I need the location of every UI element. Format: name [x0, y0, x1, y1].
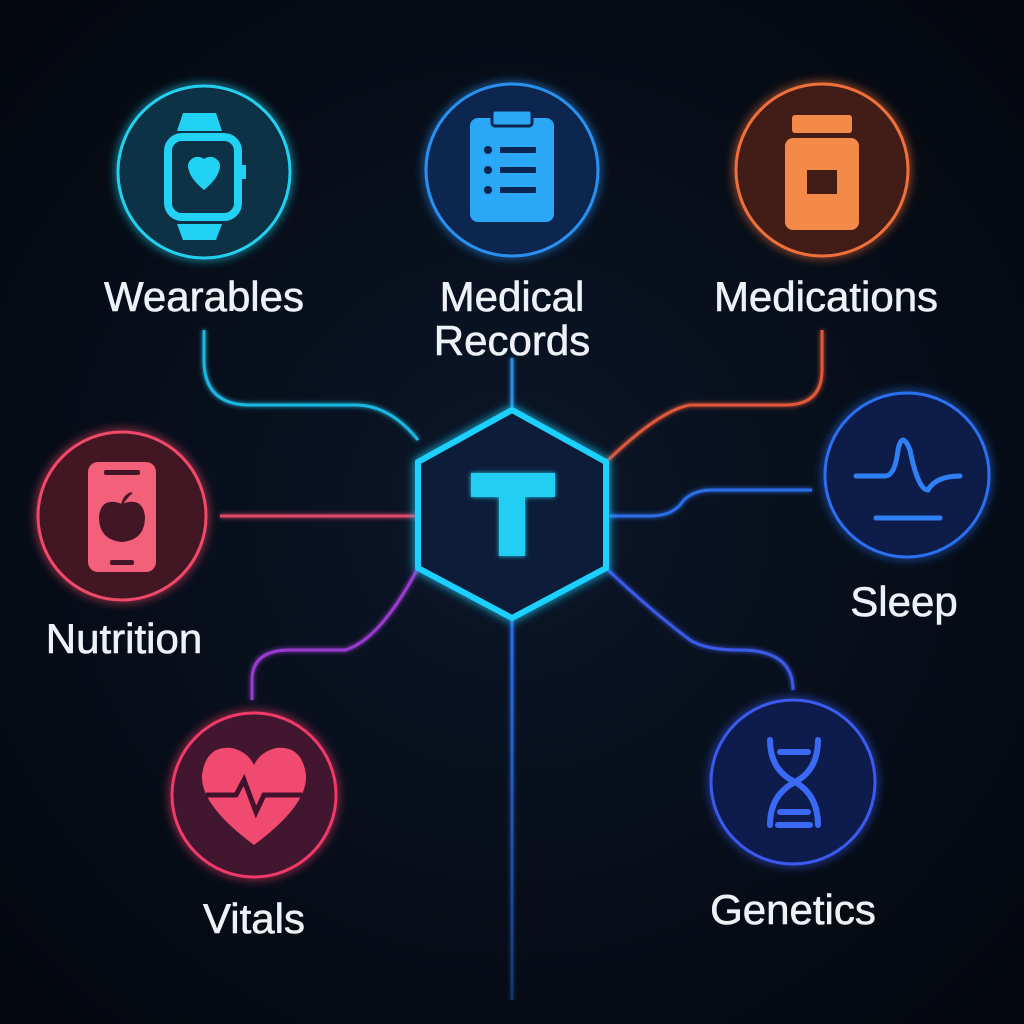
icon: DNA	[770, 740, 818, 825]
connector lines	[204, 330, 822, 1000]
center hexagon logo	[418, 410, 606, 618]
node: Medical Records: Medical	[440, 273, 584, 320]
node: Nutrition	[38, 432, 206, 662]
icon: sleep wave	[856, 440, 960, 518]
node: Vitals	[172, 713, 336, 942]
icon: pill bottle	[785, 115, 859, 230]
node: Wearables	[104, 86, 304, 320]
node: Medical Records	[426, 84, 598, 364]
node: Vitals: Vitals	[203, 895, 305, 942]
icon: clipboard	[470, 110, 554, 222]
node: Genetics	[710, 700, 876, 933]
node: Wearables: Wearables	[104, 273, 304, 320]
T glyph	[471, 473, 555, 556]
icon: phone with apple	[88, 462, 156, 572]
node: Nutrition: Nutrition	[46, 615, 202, 662]
node: Sleep	[825, 393, 989, 625]
icon: smartwatch	[168, 113, 246, 240]
node: Medications	[714, 84, 938, 320]
node: Medical Records: Records	[434, 317, 590, 364]
node: Medications: Medications	[714, 273, 938, 320]
node: Sleep: Sleep	[850, 578, 958, 625]
node: Genetics: Genetics	[710, 886, 876, 933]
icon: heart pulse	[202, 748, 306, 845]
